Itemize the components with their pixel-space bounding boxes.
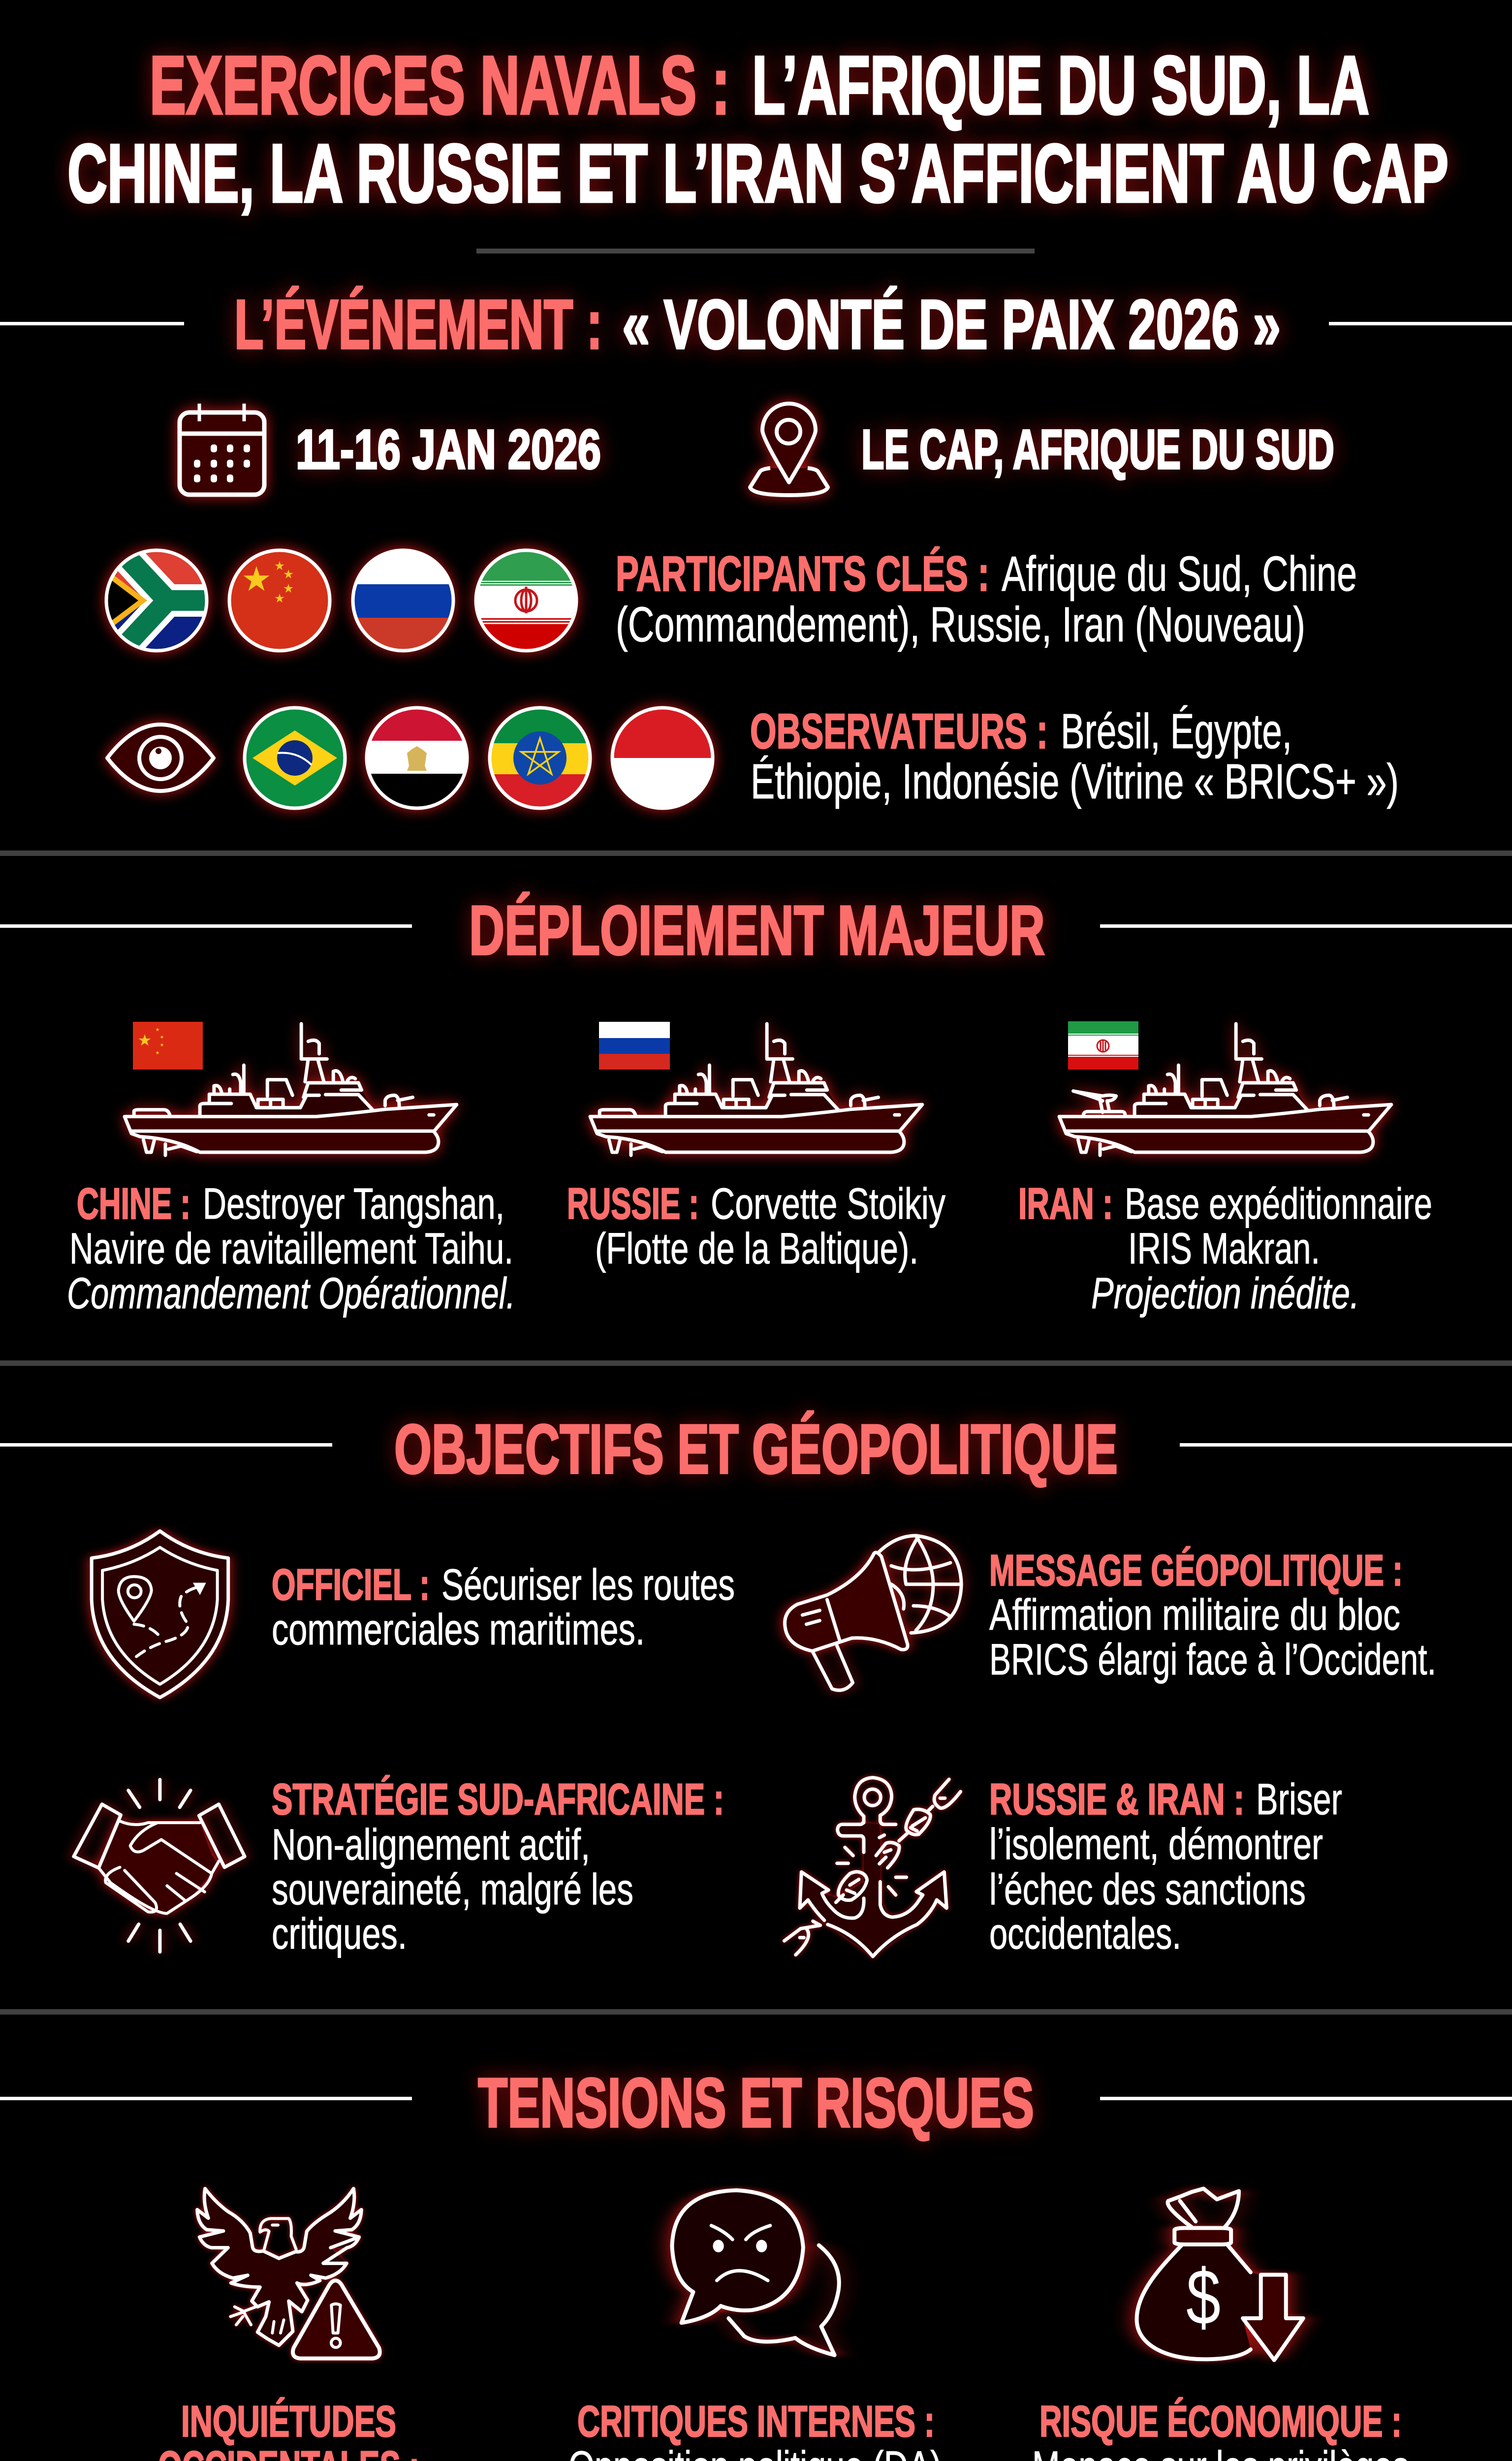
text: Russia: RUSSIE : [567,1179,699,1228]
text: observers: OBSERVATEURS : [750,704,1048,759]
text: China: Destroyer Tangshan, [203,1179,504,1228]
flag: Brazil [241,704,349,812]
heading: déploiement: DÉPLOIEMENT MAJEUR [469,891,1045,970]
text: critiques internes: CRITIQUES INTERNES : [577,2397,935,2446]
flag: Iran [472,546,580,655]
section: tensions [0,2064,1512,2461]
icon: handshake [74,1780,245,1952]
icon: missile launcher [1073,1091,1125,1116]
text: Iran: IRAN : [1018,1179,1113,1228]
heading: objectifs: OBJECTIFS ET GÉOPOLITIQUE [394,1410,1118,1488]
text: russie et iran [989,1774,1342,1958]
text: Iran: IRIS Makran. [1128,1224,1320,1273]
flag: Russia [349,546,457,655]
flag: Egypt [363,704,471,812]
flags: participants [102,544,580,657]
text: China [67,1179,515,1318]
flag: Russia small [599,1022,670,1070]
text: officiel: Sécuriser les routes [441,1560,735,1609]
icon: ship Iran [1059,1024,1391,1155]
flag: China [225,546,334,655]
icon: dollar sign: $ [1186,2253,1221,2341]
text: russie et iran: Briser [1256,1774,1342,1824]
icon: eye [107,725,214,791]
flags: observers [241,704,717,812]
section: déploiement majeur [0,891,1512,1318]
flag: Ethiopia [486,704,594,812]
text: russie et iran: l’échec des sanctions [989,1864,1306,1914]
text: China: Navire de ravitaillement Taihu. [69,1224,513,1273]
flag: Iran small [1068,1021,1138,1070]
section: l'événement [0,285,1512,812]
title [67,39,1449,220]
flag: Indonesia [608,704,717,812]
title: EXERCICES NAVALS : [150,39,730,131]
flag: South Africa [102,544,213,657]
text: Iran: Projection inédite. [1091,1268,1359,1318]
text: russie et iran: RUSSIE & IRAN : [989,1774,1244,1824]
text: stratégie: STRATÉGIE SUD-AFRICAINE : [272,1774,724,1824]
text: stratégie: critiques. [272,1909,407,1958]
heading: tensions: TENSIONS ET RISQUES [478,2064,1034,2142]
text: inquiétudes: INQUIÉTUDES [181,2397,396,2446]
icon: anchor broken chain [784,1778,961,1956]
text: stratégie: Non-alignement actif, [272,1820,590,1869]
icon: megaphone globe [785,1536,961,1690]
text: russie et iran: l’isolement, démontrer [989,1819,1323,1868]
text: officiel: commerciales maritimes. [272,1605,645,1654]
text: message géopolitique: Affirmation militaire du bloc [989,1590,1400,1639]
text: message géopolitique [989,1546,1436,1684]
text: risque économique [1032,2397,1409,2461]
text: Iran [1018,1179,1432,1318]
icon: ship Russia [590,1024,922,1155]
text: China: CHINE : [77,1179,190,1228]
text: stratégie: souveraineté, malgré les [272,1864,633,1914]
icon: shield route [92,1531,228,1698]
text: Russia: (Flotte de la Baltique). [595,1224,918,1273]
icon: location pin [750,404,828,495]
text: officiel [272,1560,735,1654]
text: observers [750,704,1399,809]
icon: ship China [125,1024,457,1155]
text: critiques internes [568,2397,942,2461]
heading: l'événement: L’ÉVÉNEMENT : [234,285,602,364]
flag: China small [133,1022,203,1070]
icon: calendar [180,404,264,495]
heading: l'événement [234,285,1281,364]
icon: eagle warning [197,2189,380,2359]
icon: angry speech bubbles [672,2190,839,2355]
text: participants: PARTICIPANTS CLÉS : [616,546,989,601]
text: inquiétudes [110,2397,468,2461]
text: China: Commandement Opérationnel. [67,1268,515,1318]
icon: money bag down arrow [1137,2189,1303,2360]
text: russie et iran: occidentales. [989,1909,1181,1958]
text: officiel: OFFICIEL : [272,1560,430,1609]
text: participants: Afrique du Sud, Chine [1002,546,1357,601]
text: participants [616,546,1357,652]
text: Russia [567,1179,945,1273]
date: 11-16 JAN 2026 [296,418,601,480]
text: observers: Brésil, Égypte, [1061,704,1292,759]
text: stratégie [272,1774,724,1958]
section: objectifs [0,1410,1512,1958]
text: Russia: Corvette Stoikiy [711,1179,945,1228]
